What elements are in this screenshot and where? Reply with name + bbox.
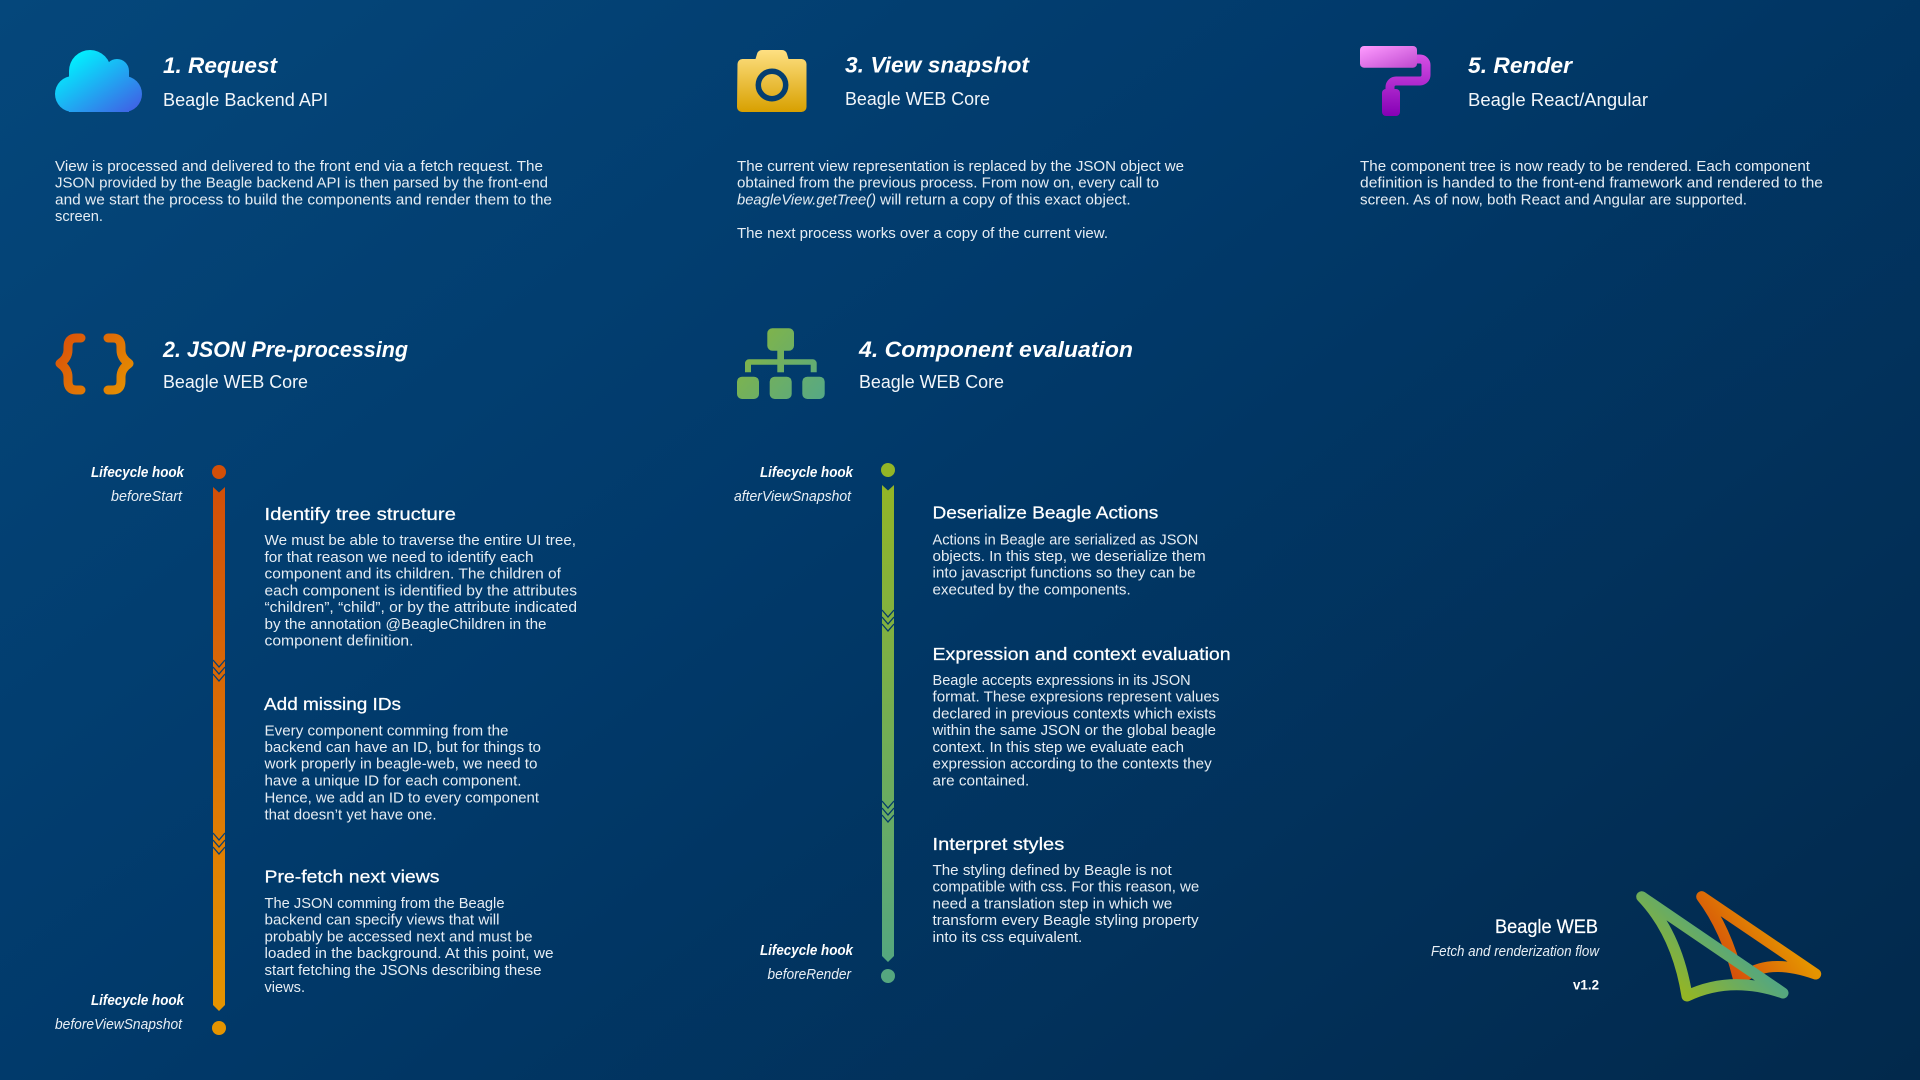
heading: 2. JSON Pre-processing: 2. JSON Pre-processing: [162, 337, 408, 362]
step: Interpret styles: transform every Beagle styling property: [932, 912, 1199, 929]
step: Pre-fetch next views: The JSON comming from the Beagle: [264, 895, 504, 912]
description text: definition is handed to the front-end framework and rendered to the: [1360, 175, 1823, 192]
step: Add missing IDs: backend can have an ID, but for things to: [264, 739, 541, 756]
step: Identify tree structure: We must be able to traverse the entire UI tree,: [264, 532, 576, 549]
step: Interpret styles: The styling defined by Beagle is not: [932, 862, 1173, 879]
lifecycle hook: beforeStart: [91, 465, 185, 505]
step: Expression and context evaluation: [932, 644, 1231, 789]
icon: curly braces: [60, 338, 129, 390]
step: Pre-fetch next views: backend can specify views that will: [264, 912, 500, 929]
step: Add missing IDs: work properly in beagle-web, we need to: [263, 756, 538, 773]
lifecycle hook: beforeRender: [760, 943, 854, 983]
step: Identify tree structure: component definition.: [264, 632, 414, 650]
icon: component tree: [737, 328, 825, 399]
step: Pre-fetch next views: loaded in the background. At this point, we: [264, 945, 554, 962]
panel: 3. View snapshot: [737, 50, 1184, 242]
step: Expression and context evaluation: Expression and context evaluation: [932, 644, 1231, 664]
subtitle: Beagle WEB Core: Beagle WEB Core: [163, 372, 308, 392]
title block: Beagle WEB: Beagle WEB: [1495, 917, 1598, 938]
panel: 2. JSON Pre-processing: [55, 337, 577, 1035]
step: Deserialize Beagle Actions: Actions in Beagle are serialized as JSON: [932, 531, 1198, 548]
panel: 1. Request: [55, 50, 552, 225]
description text: beagleView.getTree(): [737, 191, 876, 208]
step: Expression and context evaluation: context. In this step we evaluate each: [932, 739, 1184, 756]
step: Deserialize Beagle Actions: Deserialize Beagle Actions: [932, 502, 1158, 522]
description text: and we start the process to build the components and render them to the: [55, 191, 552, 208]
step: Deserialize Beagle Actions: objects. In this step, we deserialize them: [932, 548, 1206, 565]
description text: screen. As of now, both React and Angular are supported.: [1360, 191, 1747, 208]
step: Identify tree structure: for that reason we need to identify each: [264, 549, 534, 566]
description text: JSON provided by the Beagle backend API is then parsed by the front-end: [55, 175, 548, 192]
heading: 3. View snapshot: 3. View snapshot: [845, 53, 1031, 78]
heading: 5. Render: 5. Render: [1468, 53, 1573, 78]
heading: 4. Component evaluation: 4. Component evaluation: [858, 337, 1133, 362]
description text: The component tree is now ready to be rendered. Each component: [1360, 158, 1811, 175]
lifecycle hook: beforeRender: Lifecycle hook: [760, 943, 854, 959]
icon: cloud: [55, 50, 142, 112]
subtitle: Beagle WEB Core: Beagle WEB Core: [859, 372, 1004, 392]
title block: Beagle WEB: [1431, 917, 1600, 992]
lifecycle hook: beforeStart: beforeStart: [111, 489, 183, 505]
icon: camera: [737, 50, 806, 112]
panel: 5. Render: [1360, 46, 1823, 208]
heading: 1. Request: 1. Request: [163, 53, 278, 78]
step: Expression and context evaluation: are contained.: [932, 772, 1029, 789]
description text: View is processed and delivered to the front end via a fetch request. The: [55, 158, 543, 175]
step: Interpret styles: compatible with css. For this reason, we: [932, 879, 1199, 896]
step: Deserialize Beagle Actions: executed by the components.: [932, 581, 1131, 598]
step: Add missing IDs: have a unique ID for each component.: [264, 772, 522, 790]
step: Add missing IDs: Hence, we add an ID to every component: [264, 789, 540, 806]
subtitle: Beagle React/Angular: Beagle React/Angular: [1468, 90, 1648, 110]
step: Add missing IDs: Every component comming from the: [264, 723, 508, 740]
lifecycle hook: afterViewSnapshot: Lifecycle hook: [760, 465, 854, 481]
step: Identify tree structure: component and its children. The children of: [264, 566, 562, 582]
step: Identify tree structure: Identify tree structure: [264, 504, 456, 524]
step: Add missing IDs: [263, 694, 541, 823]
description text: will return a copy of this exact object.: [879, 191, 1131, 208]
description text: screen.: [55, 208, 103, 225]
description text: [1360, 158, 1823, 208]
title block: Beagle WEB: v1.2: [1573, 976, 1599, 992]
step: Identify tree structure: [264, 504, 577, 650]
step: Interpret styles: need a translation step in which we: [932, 895, 1172, 912]
subtitle: Beagle Backend API: Beagle Backend API: [163, 90, 328, 110]
icon: paint roller: [1360, 46, 1426, 116]
lifecycle hook: beforeStart: Lifecycle hook: [91, 465, 185, 481]
step: Pre-fetch next views: probably be accessed next and must be: [264, 928, 532, 945]
title block: Beagle WEB: Fetch and renderization flow: [1431, 944, 1600, 960]
step: Expression and context evaluation: declared in previous contexts which exists: [932, 705, 1216, 722]
lifecycle hook: beforeViewSnapshot: [55, 993, 185, 1033]
step: Identify tree structure: “children”, “child”, or by the attribute indicated: [264, 599, 577, 616]
step: Identify tree structure: each component is identified by the attributes: [264, 582, 577, 599]
step: Interpret styles: [932, 834, 1199, 946]
lifecycle hook: beforeViewSnapshot: Lifecycle hook: [91, 993, 185, 1009]
step: Pre-fetch next views: start fetching the JSONs describing these: [264, 962, 542, 979]
step: Interpret styles: Interpret styles: [932, 834, 1064, 854]
subtitle: Beagle WEB Core: Beagle WEB Core: [845, 89, 990, 109]
description text: [55, 158, 552, 225]
description text: obtained from the previous process. From now on, every call to: [737, 175, 1159, 192]
step: Expression and context evaluation: format. These expresions represent values: [932, 689, 1220, 706]
step: Interpret styles: into its css equivalent.: [932, 929, 1082, 946]
description text: The next process works over a copy of the current view.: [737, 225, 1108, 242]
description text: [737, 158, 1184, 242]
step: Identify tree structure: by the annotation @BeagleChildren in the: [264, 616, 546, 633]
step: Expression and context evaluation: Beagle accepts expressions in its JSON: [932, 672, 1191, 689]
step: Pre-fetch next views: views.: [264, 979, 305, 996]
panel: 4. Component evaluation: [734, 328, 1231, 983]
lifecycle hook: afterViewSnapshot: afterViewSnapshot: [734, 489, 852, 505]
step: Expression and context evaluation: expression according to the contexts they: [932, 756, 1212, 773]
lifecycle hook: afterViewSnapshot: [734, 465, 854, 505]
lifecycle hook: beforeViewSnapshot: beforeViewSnapshot: [55, 1017, 183, 1033]
lifecycle hook: beforeRender: beforeRender: [768, 967, 852, 983]
logo: Beagle sails: [1642, 897, 1816, 996]
step: Add missing IDs: that doesn’t yet have one.: [264, 806, 436, 823]
step: Add missing IDs: Add missing IDs: [264, 694, 401, 714]
description text: The current view representation is replaced by the JSON object we: [737, 158, 1184, 175]
step: Deserialize Beagle Actions: [932, 502, 1206, 598]
timeline: orange: [212, 465, 226, 1035]
step: Expression and context evaluation: within the same JSON or the global beagle: [932, 722, 1216, 739]
step: Deserialize Beagle Actions: into javascript functions so they can be: [932, 565, 1196, 582]
timeline: green: [881, 463, 895, 983]
step: Pre-fetch next views: [264, 867, 554, 996]
step: Pre-fetch next views: Pre-fetch next views: [264, 867, 440, 887]
